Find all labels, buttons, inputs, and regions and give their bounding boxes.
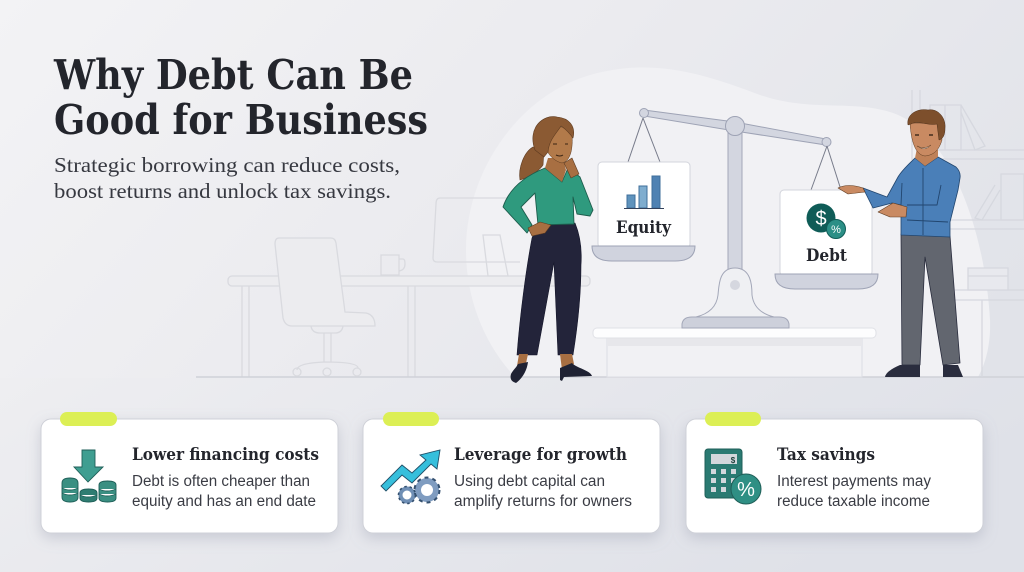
card: lower financing costs	[41, 412, 338, 533]
equity pan	[592, 162, 695, 261]
card text: reduce taxable income	[777, 493, 930, 510]
card: tax savings	[686, 412, 983, 533]
scale column and base	[682, 128, 789, 328]
card heading: Tax savings	[777, 445, 875, 464]
card heading: Lower financing costs	[132, 445, 319, 464]
scale beam	[640, 108, 831, 146]
card text: amplify returns for owners	[454, 493, 632, 510]
hair	[533, 117, 574, 157]
tab accent	[383, 412, 439, 426]
background office: desk and chair	[196, 198, 1024, 377]
card text	[454, 473, 632, 510]
card: leverage for growth	[363, 412, 660, 533]
man figure	[838, 110, 963, 377]
woman figure	[503, 117, 593, 383]
pants	[901, 234, 960, 365]
debt label: Debt	[806, 246, 847, 265]
icon: calculator and percent: $	[731, 456, 736, 465]
icon: dollar and percent coins: $	[815, 208, 827, 230]
pants	[517, 223, 581, 355]
icon: calculator and percent	[705, 449, 761, 504]
table under the scale	[593, 328, 876, 377]
arms, shirt lines	[901, 168, 948, 235]
neck	[545, 158, 566, 182]
icon: calculator and percent: %	[737, 479, 755, 501]
icon: growth arrow and gears	[381, 450, 440, 504]
icon: dollar and percent coins: %	[831, 224, 841, 236]
shirt	[863, 157, 960, 237]
subtitle: Strategic borrowing can reduce costs,	[54, 153, 400, 177]
background blob	[466, 67, 990, 377]
icon: dollar and percent coins	[806, 204, 846, 238]
tab accent	[60, 412, 117, 426]
card heading: Leverage for growth	[454, 445, 627, 464]
subtitle	[54, 153, 400, 203]
icon: arrow and coins	[62, 450, 116, 502]
card text: Using debt capital can	[454, 473, 605, 490]
neck	[915, 148, 938, 166]
card text: equity and has an end date	[132, 493, 316, 510]
title: Good for Business	[54, 95, 428, 144]
hand on hip	[528, 222, 551, 236]
shirt	[503, 168, 593, 233]
feet skin	[516, 354, 574, 372]
face	[545, 127, 572, 163]
icon: bar chart	[624, 176, 664, 208]
shoes	[511, 362, 592, 383]
equity label: Equity	[616, 218, 671, 237]
card text: Interest payments may	[777, 473, 931, 490]
hair	[908, 110, 945, 140]
scale strings	[628, 118, 841, 190]
balance scale	[592, 108, 878, 328]
face details	[553, 144, 568, 156]
hands	[838, 186, 907, 217]
card text: Debt is often cheaper than	[132, 473, 310, 490]
face	[910, 123, 942, 156]
hand at chin	[564, 158, 579, 178]
debt pan	[775, 190, 878, 289]
tab accent	[705, 412, 761, 426]
subtitle: boost returns and unlock tax savings.	[54, 179, 391, 203]
ponytail	[520, 147, 544, 180]
card text	[777, 473, 931, 510]
title: Why Debt Can Be	[53, 50, 413, 99]
card text	[132, 473, 316, 510]
face details	[915, 135, 933, 149]
shoes	[885, 365, 963, 377]
background office: shelves	[912, 90, 1024, 377]
title	[53, 50, 428, 144]
